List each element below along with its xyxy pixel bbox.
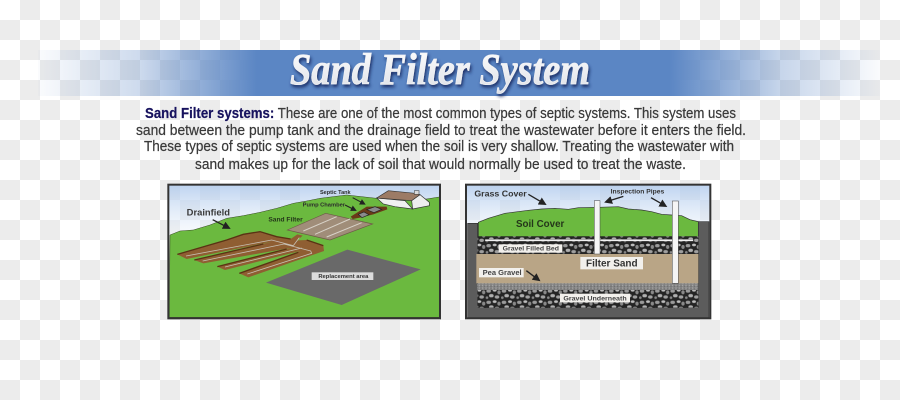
gravel underneath bbox=[478, 290, 698, 308]
label: gravel filled bed: Gravel Filled Bed bbox=[503, 246, 559, 253]
label: pea gravel: Pea Gravel bbox=[483, 268, 522, 277]
label: sand filter: Sand Filter bbox=[268, 216, 303, 223]
soil cover bbox=[478, 207, 698, 237]
sand filter bed bbox=[287, 213, 373, 240]
panel: site layout diagram bbox=[168, 185, 440, 318]
drainfield trenches bbox=[177, 232, 324, 277]
label: inspection pipes: Inspection Pipes bbox=[611, 189, 665, 196]
panel: cross-section diagram bbox=[466, 185, 710, 318]
label: grass cover: Grass Cover bbox=[474, 188, 527, 198]
green ground bbox=[169, 195, 439, 317]
label: soil cover: Soil Cover bbox=[516, 219, 564, 230]
label: inspection pipes bbox=[607, 189, 665, 206]
label: drainfield: Drainfield bbox=[187, 208, 230, 218]
description text: sand makes up for the lack of soil that would normally be used to treat the waste. bbox=[195, 157, 686, 173]
replacement area: Replacement area bbox=[318, 274, 369, 280]
concrete container bbox=[468, 222, 709, 318]
label: septic tank bbox=[320, 190, 364, 204]
label: pump chamber: Pump Chamber bbox=[303, 203, 346, 209]
banner bbox=[38, 50, 880, 100]
label: septic tank: Septic Tank bbox=[320, 190, 352, 196]
label: pump chamber bbox=[303, 203, 355, 210]
frame bbox=[168, 185, 440, 318]
label: pea gravel bbox=[479, 268, 538, 280]
description text: Sand Filter systems: These are one of the most common types of septic systems. This system uses bbox=[145, 106, 736, 122]
gravel filled bed bbox=[478, 236, 698, 254]
filter sand bbox=[476, 254, 698, 283]
label: grass cover bbox=[474, 188, 544, 204]
septic tanks and pipe bbox=[351, 207, 387, 219]
distribution pipe bbox=[485, 239, 693, 241]
label: drainfield bbox=[187, 208, 230, 228]
inspection pipes bbox=[594, 201, 678, 283]
title: Sand Filter System bbox=[290, 45, 590, 94]
label: filter sand: Filter Sand bbox=[586, 259, 638, 270]
replacement area bbox=[266, 250, 421, 305]
pea gravel layer bbox=[477, 283, 698, 290]
label: gravel underneath bbox=[560, 294, 630, 302]
description text bbox=[136, 106, 746, 173]
frame bbox=[466, 185, 710, 318]
description text: These types of septic systems are used when the soil is very shallow. Treating the wastewater with bbox=[144, 139, 734, 155]
label: gravel underneath: Gravel Underneath bbox=[563, 295, 627, 302]
description text: sand between the pump tank and the drainage field to treat the wastewater before it enters the field. bbox=[136, 123, 746, 139]
house bbox=[377, 191, 429, 209]
